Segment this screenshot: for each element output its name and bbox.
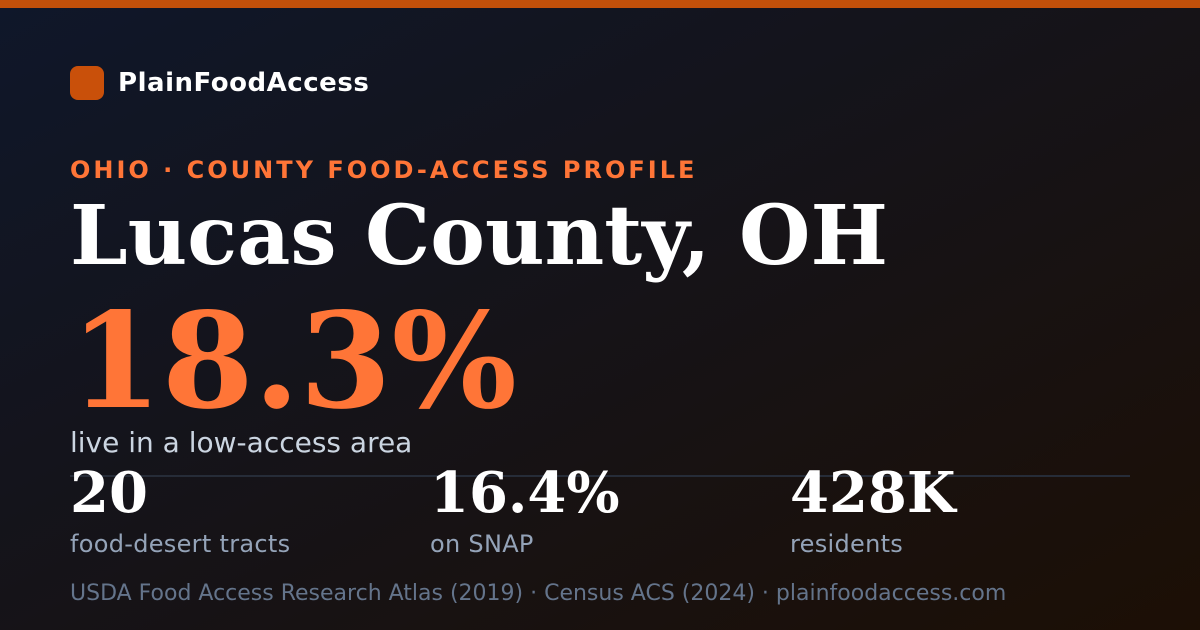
eyebrow: OHIO · COUNTY FOOD-ACCESS PROFILE	[70, 156, 697, 184]
headline stat label: live in a low-access area	[70, 426, 412, 459]
stat value: 428K	[790, 460, 956, 526]
brand logo mark	[70, 66, 104, 100]
brand name: PlainFoodAccess	[118, 68, 369, 98]
stat label: food-desert tracts	[70, 530, 290, 558]
title: Lucas County, OH	[70, 188, 888, 284]
stat value: 16.4%	[430, 460, 620, 526]
stat: food-desert tracts	[70, 460, 290, 558]
stat value: 20	[70, 460, 148, 526]
stat label: on SNAP	[430, 530, 534, 558]
divider	[70, 475, 1130, 477]
stat label: residents	[790, 530, 903, 558]
stat: residents	[790, 460, 958, 558]
stat: on SNAP	[430, 460, 620, 558]
headline stat: 18.3%	[70, 284, 517, 439]
top accent bar	[0, 0, 1200, 8]
footer sources: USDA Food Access Research Atlas (2019) · Census ACS (2024) · plainfoodaccess.com	[70, 581, 1006, 606]
